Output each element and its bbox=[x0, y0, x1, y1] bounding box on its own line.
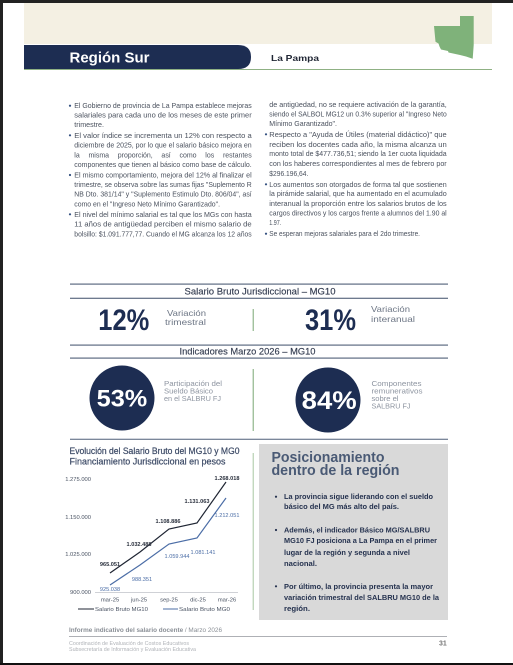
data labels: MG0: 1.081.141 bbox=[191, 550, 215, 556]
icon: La Pampa map bbox=[434, 16, 474, 59]
header band bbox=[24, 3, 492, 70]
panel bullets: variación trimestral del SALBRU MG10 de la bbox=[284, 593, 440, 602]
text block: right column: interanual la proporción entre los salarios brutos de los bbox=[269, 199, 447, 208]
text block: right column: 1.97. bbox=[269, 218, 281, 227]
stat: 84%: Componentes bbox=[372, 379, 422, 388]
chart: evolución salario bruto bbox=[65, 446, 240, 613]
stat: 31% variación interanual: interanual bbox=[371, 314, 415, 324]
stat: 84% bbox=[296, 368, 423, 432]
data labels: MG0: 925.038 bbox=[100, 587, 120, 593]
text block: right column: de antigüedad, no se requiere activación de la garantía, bbox=[269, 100, 447, 109]
stat: 12% variación trimestral: Variación bbox=[167, 308, 206, 318]
text block: right column: Respecto a "Ayuda de Útiles (material didáctico)" que bbox=[269, 130, 447, 139]
y axis labels: 1.025.000 bbox=[65, 552, 91, 558]
text block: right column: Los aumentos son otorgados de forma tal que sostienen bbox=[269, 180, 447, 189]
text block: left column: trimestre. bbox=[74, 120, 104, 129]
data labels: MG10 bbox=[100, 476, 239, 568]
text block: right column: cargos directivos y los cargos frente a alumnos del 1.90 al bbox=[269, 208, 447, 218]
heading: Región Sur: Región Sur bbox=[70, 50, 150, 66]
panel bullets: nacional. bbox=[284, 559, 317, 568]
text block: left column bbox=[69, 101, 252, 238]
text block: left column: El mismo comportamiento, mejora del 12% al finalizar el bbox=[74, 170, 252, 180]
text block: left column: componentes que tienen al básico como base de cálculo. bbox=[74, 160, 252, 169]
panel heading bbox=[272, 450, 400, 479]
footer: Coordinación de Evaluación de Costos Educativos bbox=[69, 641, 190, 647]
data labels: MG10: 1.032.488 bbox=[127, 542, 151, 548]
x axis labels: dic-25 bbox=[190, 598, 206, 604]
data labels: MG10: 1.268.018 bbox=[215, 476, 239, 482]
text block: right column: monto total de $477.736,51; siendo la 1er cuota liquidada bbox=[269, 149, 447, 158]
text block: left column: trimestre, se observa sobre las sumas fijas "Suplemento R bbox=[74, 180, 252, 189]
y axis labels: 900.000 bbox=[70, 590, 91, 596]
text block: left column: como en el "Ingreso Neto Mínimo Garantizado". bbox=[74, 200, 220, 208]
panel bullets: básico del MG más alto del país. bbox=[284, 502, 399, 511]
y axis labels: 1.150.000 bbox=[65, 515, 91, 521]
panel: Posicionamiento dentro de la región bbox=[259, 444, 448, 620]
panel bullets: lugar de la región y segunda a nivel bbox=[284, 548, 410, 557]
panel bullets: Además, el indicador Básico MG/SALBRU bbox=[284, 526, 430, 534]
panel bullets: región. bbox=[284, 604, 310, 613]
text block: right column: Mínimo Garantizado". bbox=[269, 119, 337, 128]
text block: right column: reciben los docentes cada año, la misma alcanza un bbox=[269, 140, 447, 149]
text block: left column: bolsillo: $1.091.777,77. Cuando el MG alcanza los 12 años bbox=[74, 230, 252, 238]
text block: left column: la misma proporción, así como los restantes bbox=[74, 150, 252, 160]
panel bullets bbox=[275, 492, 440, 613]
heading: Salario Bruto Jurisdiccional: Salario Bruto Jurisdiccional – MG10 bbox=[184, 286, 336, 298]
x axis labels: mar-25 bbox=[101, 598, 119, 604]
stat: 12% variación trimestral: trimestral bbox=[165, 317, 206, 327]
stat: 31% variación interanual bbox=[305, 304, 415, 337]
chart title: Evolución del Salario Bruto del MG10 y MG0 bbox=[70, 446, 240, 456]
stat: 84%: SALBRU FJ bbox=[372, 402, 411, 410]
panel heading: dentro de la región bbox=[272, 463, 400, 479]
stat: 53%: en el SALBRU FJ bbox=[164, 394, 221, 403]
chart title: Financiamiento Jurisdiccional en pesos bbox=[70, 456, 226, 466]
stat: 12% variación trimestral bbox=[98, 304, 206, 337]
footer: Informe indicativo del salario docente / Marzo 2026 bbox=[69, 627, 222, 634]
line: MG0 bbox=[110, 498, 226, 585]
y axis labels: 1.275.000 bbox=[65, 477, 91, 483]
stat: 84%: sobre el bbox=[372, 394, 399, 403]
panel bullets: La provincia sigue liderando con el sueldo bbox=[284, 492, 434, 501]
text block: right column bbox=[265, 100, 447, 238]
stat: 53% bbox=[90, 366, 222, 430]
legend: Salario Bruto MG0 bbox=[179, 607, 230, 613]
text block: right column: con los haberes correspondientes al mes de febrero por bbox=[269, 159, 447, 168]
heading: La Pampa: La Pampa bbox=[271, 53, 319, 63]
text block: right column: Se esperan mejoras salariales para el 2do trimestre. bbox=[269, 229, 420, 238]
panel bullets: MG10 FJ posiciona a La Pampa en el primer bbox=[284, 536, 437, 545]
data labels: MG0: 1.059.944 bbox=[165, 554, 189, 560]
stat: 84%: remunerativos bbox=[372, 386, 423, 396]
footer bbox=[69, 627, 447, 653]
stat: 53%: Sueldo Básico bbox=[164, 386, 213, 396]
heading: Región Sur bbox=[24, 45, 251, 69]
text block: left column: El valor índice se incrementa un 12% con respecto a bbox=[74, 131, 252, 140]
panel heading: Posicionamiento bbox=[272, 450, 385, 466]
x axis labels: sep-25 bbox=[160, 598, 178, 604]
panel bullets: Por último, la provincia presenta la mayor bbox=[284, 582, 433, 591]
footer: 31 bbox=[439, 640, 447, 648]
x axis labels: mar-26 bbox=[218, 598, 236, 604]
stat: 31% variación interanual: Variación bbox=[371, 304, 410, 314]
data labels: MG10: 1.131.063 bbox=[185, 499, 209, 505]
footer: Subsecretaría de Información y Evaluación Educativa bbox=[69, 647, 196, 653]
text block: right column: la pirámide salarial, que ha aumentado en el acumulado bbox=[269, 189, 447, 198]
text block: right column: $296.196,64. bbox=[269, 169, 308, 178]
x axis labels: jun-25 bbox=[130, 598, 147, 604]
text block: left column: salariales para cada uno de los meses de este primer bbox=[74, 111, 252, 120]
text block: left column: El nivel del mínimo salarial es tal que los MGs con hasta bbox=[74, 210, 252, 219]
text block: left column: diciembre de 2025, por lo que el salario básico mejora en bbox=[74, 140, 252, 150]
line: MG10 bbox=[110, 482, 226, 573]
y axis labels bbox=[65, 477, 91, 596]
text block: right column: siendo el SALBOL MG12 un 0.3% superior al "Ingreso Neto bbox=[269, 110, 447, 118]
stat: 84%: 84% bbox=[302, 387, 357, 415]
x axis labels bbox=[101, 598, 236, 604]
legend bbox=[78, 607, 230, 613]
stat: 53%: Participación del bbox=[164, 379, 222, 388]
legend: Salario Bruto MG10 bbox=[95, 607, 148, 613]
data labels: MG10: 1.108.886 bbox=[156, 519, 180, 525]
data labels: MG0 bbox=[100, 513, 239, 593]
data labels: MG10: 965.051 bbox=[100, 562, 120, 568]
stat: 31% variación interanual: 31% bbox=[305, 304, 356, 337]
heading: Indicadores Marzo 2026: Indicadores Marzo 2026 – MG10 bbox=[180, 346, 316, 358]
data labels: MG0: 988.351 bbox=[132, 577, 152, 583]
stat: 12% variación trimestral: 12% bbox=[98, 304, 149, 337]
data labels: MG0: 1.212.051 bbox=[215, 513, 239, 519]
stat: 53%: 53% bbox=[97, 386, 147, 412]
chart title bbox=[70, 446, 240, 466]
text block: left column: NB Dto. 381/14" y "Suplemento Estimulo Dto. 806/04", así bbox=[74, 190, 252, 198]
text block: left column: 11 años de antigüedad perciben el mismo salario de bbox=[74, 220, 252, 228]
text block: left column: El Gobierno de provincia de La Pampa establece mejoras bbox=[74, 101, 252, 110]
